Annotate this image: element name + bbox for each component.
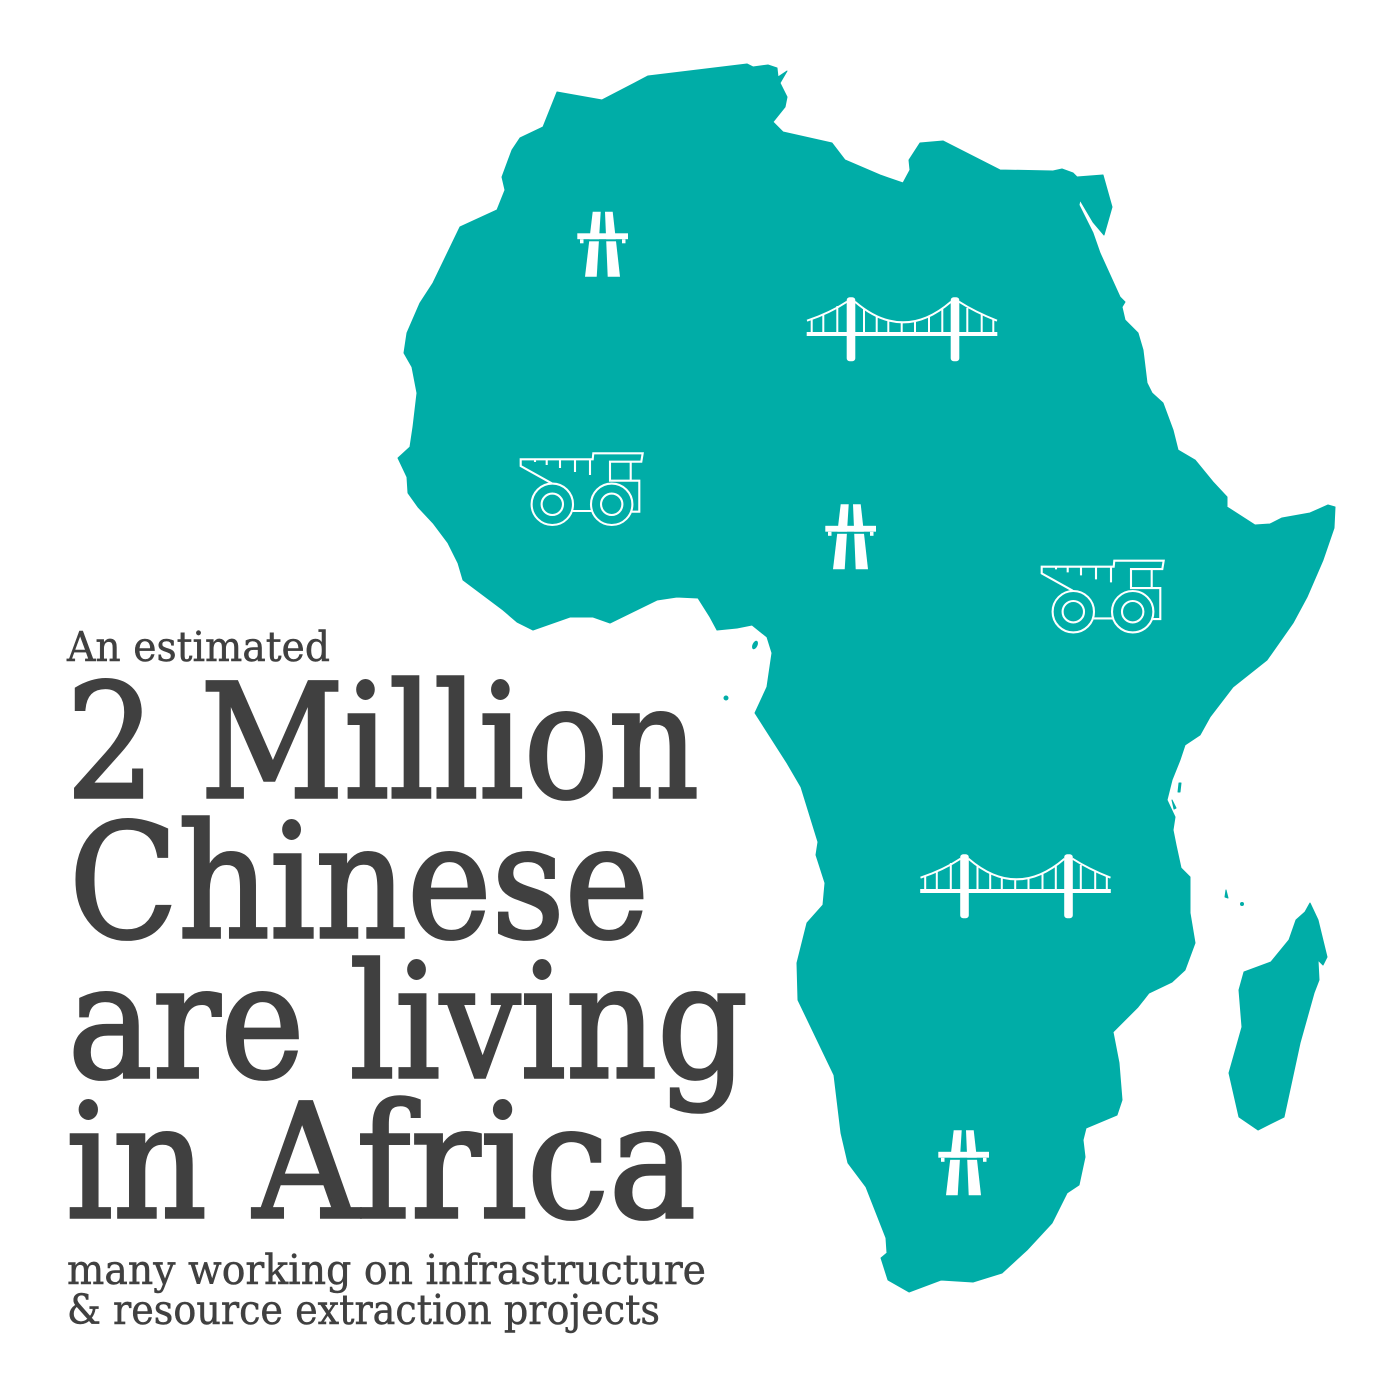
headline [66,651,748,1255]
intro text: An estimated [66,623,330,671]
supporting text: & resource extraction projects [67,1286,660,1334]
headline: are living [68,931,748,1115]
icon: motorway, north-west [577,212,628,277]
icon: motorway, south [938,1130,989,1195]
headline: 2 Million [66,651,699,835]
headline: in Africa [66,1071,696,1255]
headline: Chinese [69,791,649,975]
supporting text: many working on infrastructure [67,1246,706,1294]
map of Africa [398,64,1335,1292]
small islands [724,641,1244,906]
supporting text [67,1246,706,1334]
icon: motorway, central [825,504,876,569]
icon: dump truck, east [1042,561,1164,632]
Madagascar [1229,903,1327,1130]
mainland Africa [398,64,1335,1292]
icon: suspension bridge, north [807,297,997,361]
icon: dump truck, west [521,453,643,525]
icon: suspension bridge, south [920,854,1111,918]
